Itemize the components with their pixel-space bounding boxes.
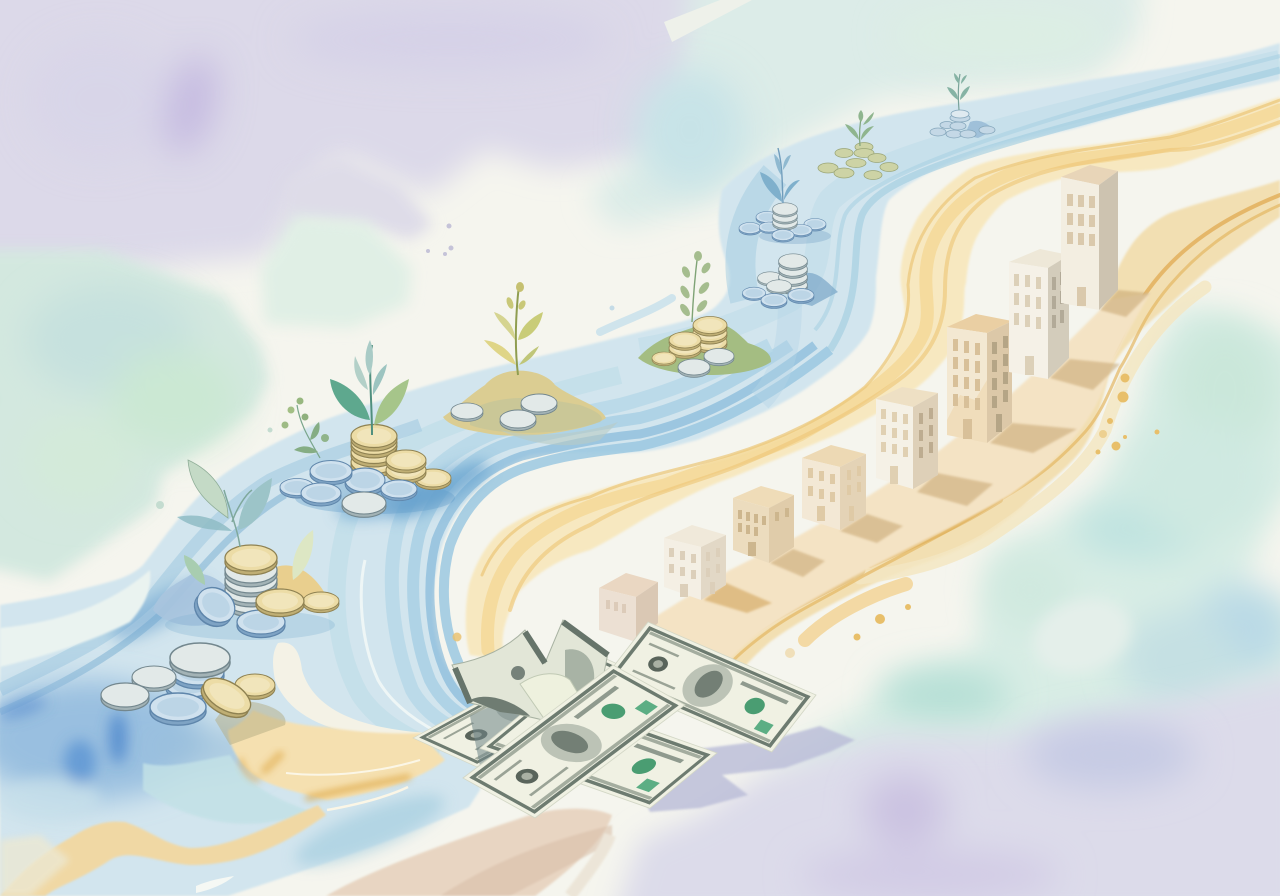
green wash right <box>760 305 1280 770</box>
bill: right <box>604 622 816 752</box>
yellow band lower left <box>0 805 326 896</box>
green wash left <box>0 250 269 581</box>
brown streams at bottom <box>326 809 612 896</box>
building 4 <box>802 445 866 530</box>
lilac wash top left <box>0 0 745 275</box>
plant: small sprout <box>947 73 970 110</box>
coin pile: bottom left <box>101 643 286 745</box>
bill: front center <box>463 665 685 818</box>
pale spot <box>1023 586 1141 686</box>
cream crescent in lower left stream <box>273 642 428 738</box>
yellow wedge lower left <box>228 710 445 810</box>
plant: green sprout <box>330 340 409 435</box>
building 3 <box>733 486 794 563</box>
plant: gold sprout <box>484 282 543 375</box>
money pile <box>413 620 816 818</box>
blue coin cluster <box>742 254 838 308</box>
lilac wash bottom right <box>612 670 1280 896</box>
deep pigment patches <box>0 680 265 800</box>
coin pile with plant: second <box>280 340 455 517</box>
bill: crumpled <box>452 620 608 720</box>
plant: olive sprig <box>678 251 712 322</box>
bill: back left <box>413 647 644 767</box>
small dots left <box>156 306 614 509</box>
pale blue lobe <box>143 755 320 824</box>
coin stack with plant: left <box>153 460 339 640</box>
yellow river lower <box>680 180 1280 685</box>
purple dots <box>426 224 454 256</box>
building 7 <box>1009 249 1069 379</box>
bill: lower <box>480 693 717 808</box>
road under buildings <box>650 290 1150 680</box>
olive coin cluster top <box>818 110 898 180</box>
building 2 <box>664 525 726 600</box>
plant: blue sprout <box>760 148 800 203</box>
white streak top <box>664 0 752 42</box>
gold mound with coins <box>443 282 618 445</box>
teal wash top <box>588 0 1145 227</box>
plant: left sprout <box>177 460 313 585</box>
building 1 <box>599 573 658 642</box>
building 6 <box>947 314 1012 443</box>
building 5 <box>876 387 938 489</box>
building 8 <box>1061 165 1118 310</box>
pale lobe upper left <box>0 570 150 667</box>
blue coin cluster top <box>930 73 995 138</box>
plant: olive sprout <box>845 110 874 146</box>
green mound with gold coins <box>638 251 771 377</box>
plant: berry sprig <box>282 398 329 458</box>
green wash center <box>261 215 412 328</box>
paint splatter dots <box>452 374 1160 658</box>
grey-lilac blob <box>270 156 433 260</box>
blue sprout coin cluster <box>739 148 831 244</box>
yellow river upper <box>466 97 1280 660</box>
shadow under money <box>640 726 855 812</box>
